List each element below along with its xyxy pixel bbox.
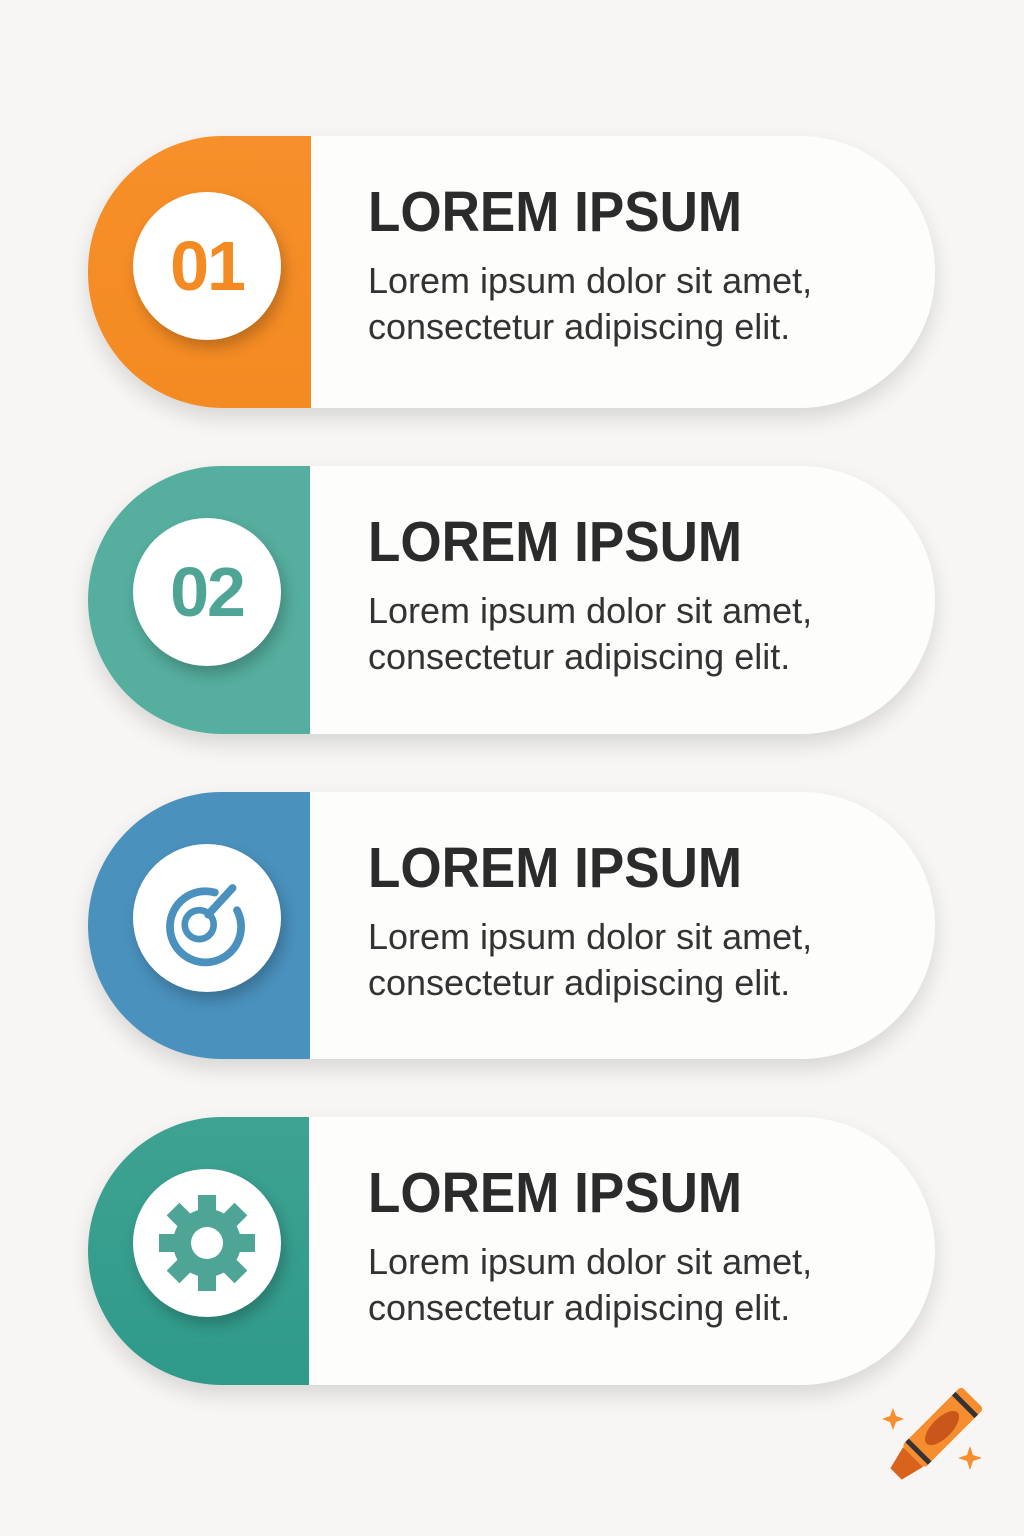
- heading 4: LOREM IPSUM: [368, 1161, 742, 1225]
- side: teal: [88, 466, 310, 734]
- icon: target: [133, 844, 281, 992]
- text 3: [368, 916, 812, 1003]
- heading 3: LOREM IPSUM: [368, 836, 742, 900]
- text 2: consectetur adipiscing elit.: [368, 636, 790, 677]
- card 4: [88, 1117, 935, 1385]
- text 4: consectetur adipiscing elit.: [368, 1287, 790, 1328]
- badge 02: 02: [170, 553, 244, 631]
- text 1: consectetur adipiscing elit.: [368, 306, 790, 347]
- heading 1: LOREM IPSUM: [368, 180, 742, 244]
- badge 01: [133, 192, 281, 340]
- text 2: [368, 590, 812, 677]
- text 4: [368, 1241, 812, 1328]
- side: orange: [88, 136, 311, 408]
- card 1: [88, 136, 935, 408]
- heading 2: LOREM IPSUM: [368, 510, 742, 574]
- text 1: [368, 260, 812, 347]
- text 3: Lorem ipsum dolor sit amet,: [368, 916, 812, 957]
- text 4: Lorem ipsum dolor sit amet,: [368, 1241, 812, 1282]
- icon: gear: [133, 1169, 281, 1317]
- badge 01: 01: [170, 227, 244, 305]
- text 1: Lorem ipsum dolor sit amet,: [368, 260, 812, 301]
- card 3: [88, 792, 935, 1059]
- icon: crayon: [882, 1388, 982, 1480]
- text 2: Lorem ipsum dolor sit amet,: [368, 590, 812, 631]
- text 3: consectetur adipiscing elit.: [368, 962, 790, 1003]
- card 2: [88, 466, 935, 734]
- badge 02: [133, 518, 281, 666]
- side: dark teal: [88, 1117, 309, 1385]
- side: blue: [88, 792, 310, 1059]
